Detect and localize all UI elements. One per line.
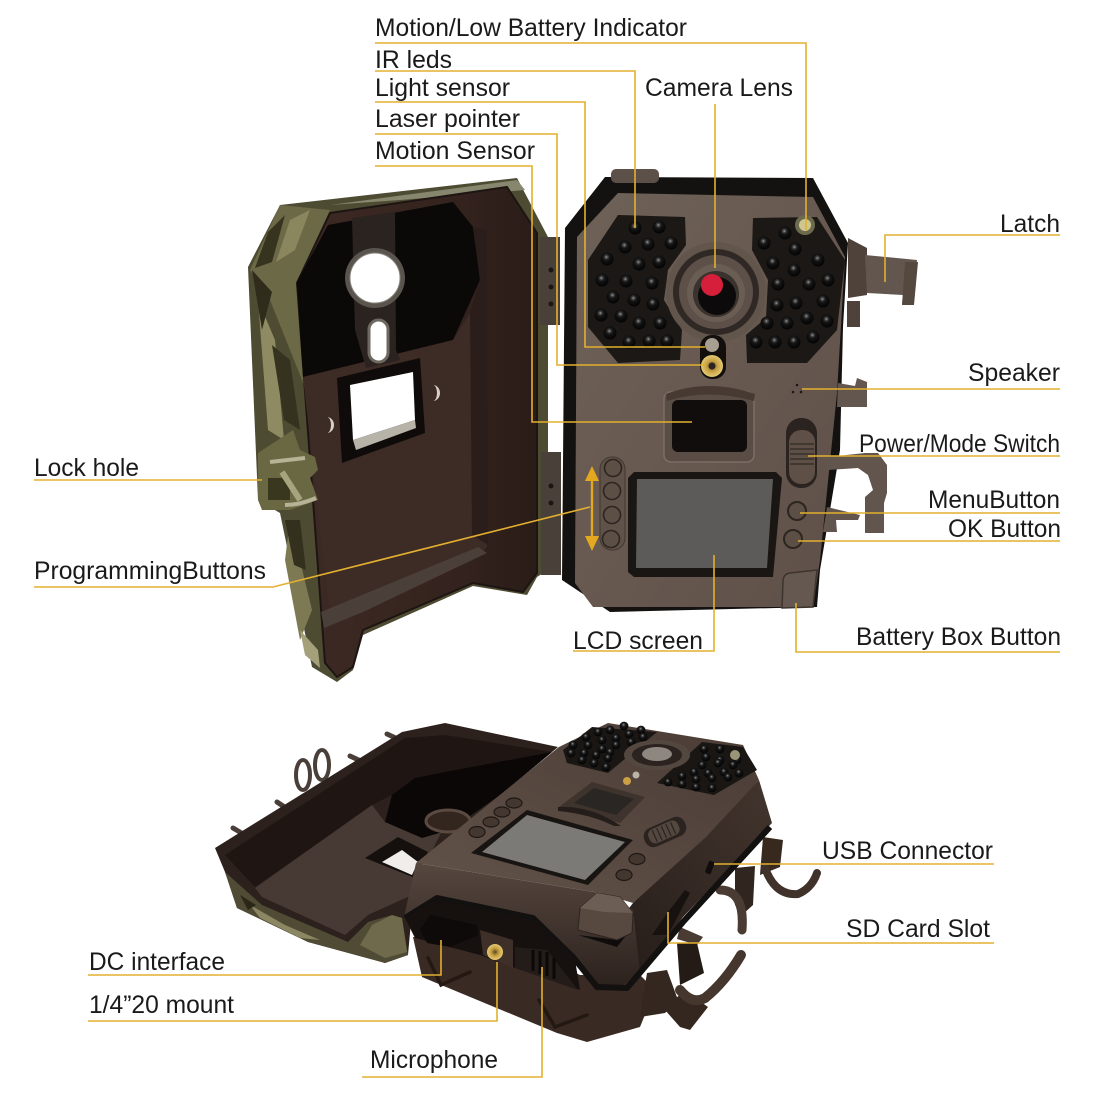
open lid [215, 723, 558, 963]
menu and ok buttons [784, 502, 806, 548]
motion sensor, bottom view [558, 782, 645, 826]
lid window [365, 837, 428, 878]
lens opening [345, 248, 405, 308]
lower box [413, 937, 655, 1042]
motion sensor [664, 386, 755, 462]
label: Lock hole: Lock hole [34, 454, 139, 482]
label: Latch [885, 210, 1060, 282]
label: USB Connector: USB Connector [822, 837, 993, 865]
screw holes [327, 385, 440, 433]
lid spikes and lock loops [233, 734, 400, 838]
label: Motion/Low Battery Indicator: Motion/Low Battery Indicator [375, 14, 687, 42]
lock hole latch [258, 430, 318, 510]
mount plate [480, 930, 513, 968]
top latch [847, 238, 918, 327]
label: Speaker: Speaker [968, 359, 1060, 387]
left IR panel, bottom view [563, 722, 657, 773]
motion sensor window [337, 358, 425, 463]
label: ProgrammingButtons [34, 473, 592, 587]
bottom ledge [321, 547, 487, 628]
brown faceplate [575, 193, 845, 607]
open camera lid, inside view [248, 178, 561, 682]
buttons, bottom view [469, 798, 645, 880]
arrow: programming buttons range [591, 473, 593, 544]
label: Laser pointer: Laser pointer [375, 105, 520, 133]
brown back panel [303, 280, 487, 618]
box hooks [428, 958, 587, 1027]
camera lens [666, 242, 766, 342]
label: Motion/Low Battery Indicator [375, 14, 806, 230]
label: IR leds: IR leds [375, 46, 452, 74]
label: Motion Sensor: Motion Sensor [375, 137, 535, 165]
right IR panel, bottom view [657, 742, 757, 795]
speaker side hook [837, 378, 867, 407]
label: SD Card Slot [668, 912, 994, 943]
label: DC interface [88, 940, 441, 976]
lid rim [215, 723, 558, 963]
label: MenuButton: MenuButton [928, 486, 1060, 514]
battery box door [782, 570, 817, 608]
left IR led panel [588, 215, 686, 363]
side rib [470, 227, 488, 545]
LCD, bottom view [471, 810, 633, 885]
speaker holes [792, 384, 802, 393]
lid dark wall [225, 735, 552, 887]
label: SD Card Slot: SD Card Slot [846, 915, 990, 943]
tripod mount [487, 944, 503, 960]
strut [352, 212, 400, 368]
right rear latches [677, 837, 817, 985]
label: Latch: Latch [1000, 210, 1060, 238]
upper body sides [590, 780, 772, 987]
label: Battery Box Button [796, 603, 1061, 652]
lid inner tray [297, 187, 537, 677]
top mount [611, 169, 659, 183]
label: IR leds [375, 46, 635, 228]
label: DC interface: DC interface [89, 948, 225, 976]
camo outer face [225, 872, 408, 963]
power / mode switch [786, 418, 817, 488]
lid black back [385, 752, 552, 838]
label: Camera Lens: Camera Lens [645, 74, 793, 102]
corner bumper [578, 893, 633, 947]
label: Laser pointer [375, 105, 705, 365]
motion / low battery indicator [795, 215, 815, 235]
label: ProgrammingButtons: ProgrammingButtons [34, 557, 266, 585]
sensors, bottom view [623, 772, 640, 785]
label: Microphone [362, 967, 542, 1077]
black seam gasket [405, 827, 770, 988]
lower side latch [823, 453, 887, 533]
lens, bottom view [624, 740, 690, 770]
SD slot [652, 890, 690, 935]
microphone grille [515, 947, 578, 990]
label: 1/4"20 mount [88, 962, 497, 1021]
label: Light sensor [375, 74, 705, 347]
black gasket [562, 177, 848, 612]
switch, bottom view [641, 814, 689, 850]
lower side latch and fin [640, 955, 741, 1030]
lid camouflage shell [248, 178, 548, 682]
DC interface cover [420, 915, 478, 947]
USB port [705, 860, 715, 875]
recessed port band [405, 900, 580, 990]
label: Battery Box Button: Battery Box Button [856, 623, 1061, 651]
label: Microphone: Microphone [370, 1046, 498, 1074]
arrowheads [585, 466, 599, 551]
LCD screen [628, 472, 782, 577]
label: LCD screen [573, 555, 714, 655]
front of the camera [562, 169, 918, 612]
door hinges [540, 237, 561, 575]
programming buttons [600, 457, 625, 550]
light sensor and laser pointer [700, 335, 726, 379]
bottom view of camera with open lid [215, 722, 817, 1042]
slot opening [369, 320, 388, 362]
lid floor [255, 805, 445, 935]
label: Power/Mode Switch: Power/Mode Switch [859, 430, 1060, 458]
upper body front wall [404, 863, 640, 987]
label: OK Button: OK Button [948, 515, 1061, 543]
label: Light sensor: Light sensor [375, 74, 510, 102]
label: Motion Sensor [375, 137, 692, 422]
right IR led panel [746, 217, 845, 363]
lid lens ring [426, 810, 470, 832]
label: LCD screen: LCD screen [573, 627, 703, 655]
label: 1/4"20 mount: 1/4”20 mount [89, 991, 234, 1019]
dark back wall [297, 202, 480, 377]
camera top face [416, 723, 759, 903]
